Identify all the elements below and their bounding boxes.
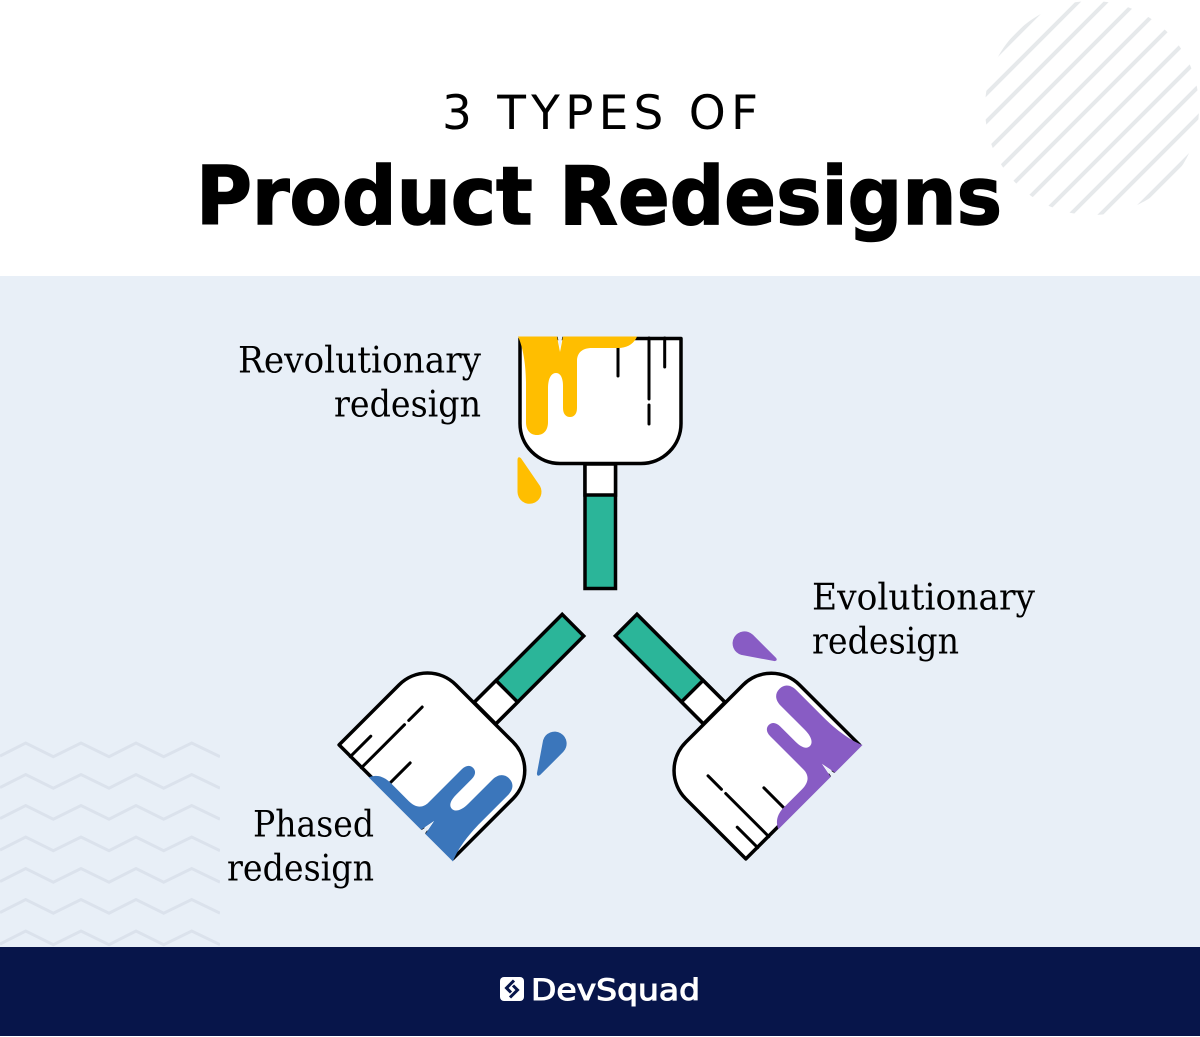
bristle lines [350, 696, 444, 790]
brush ferrule [474, 681, 518, 724]
brush head [657, 657, 860, 859]
decorative zigzag pattern [0, 743, 220, 945]
brush handle [585, 464, 616, 588]
label: phased redesign: Phased [253, 804, 374, 846]
yellow paint [518, 336, 637, 435]
label: phased redesign: redesign [227, 848, 374, 890]
paint notch [558, 336, 562, 349]
brush head [339, 656, 541, 859]
brush: phased (blue) [337, 568, 631, 862]
brush ferrule [585, 464, 616, 495]
blue paint [369, 708, 523, 862]
logo: DevSquad [500, 973, 700, 1007]
label: phased redesign [227, 804, 374, 890]
brush head [520, 338, 681, 464]
bristle lines [618, 338, 665, 424]
title line: 3 types of: 3 TYPES OF [442, 86, 758, 141]
logo wordmark: DevSquad [531, 973, 700, 1007]
purple drop [728, 626, 778, 676]
label: revolutionary redesign [238, 340, 482, 426]
label: evolutionary redesign: Evolutionary [812, 578, 1036, 618]
logo icon [500, 977, 524, 1001]
panel: light blue illustration background [0, 276, 1200, 947]
brush: revolutionary (yellow) [518, 336, 681, 588]
brush handle [615, 614, 725, 724]
decorative striped circle [986, 2, 1199, 215]
label: evolutionary redesign [812, 578, 1036, 662]
blue drop [522, 727, 572, 777]
brush handle [474, 614, 584, 724]
label: revolutionary redesign: Revolutionary [238, 340, 482, 382]
label: revolutionary redesign: redesign [334, 384, 481, 426]
footer bar [0, 947, 1200, 1036]
yellow drop [518, 457, 541, 504]
brush: evolutionary (purple) [569, 567, 863, 861]
purple paint [709, 675, 863, 829]
bristle lines [697, 754, 791, 848]
title line: product redesigns: Product Redesigns [196, 150, 1002, 243]
paint notch [822, 764, 835, 777]
label: evolutionary redesign: redesign [812, 622, 959, 662]
title [196, 86, 1002, 243]
paint notch [421, 821, 434, 834]
brush ferrule [682, 680, 725, 724]
